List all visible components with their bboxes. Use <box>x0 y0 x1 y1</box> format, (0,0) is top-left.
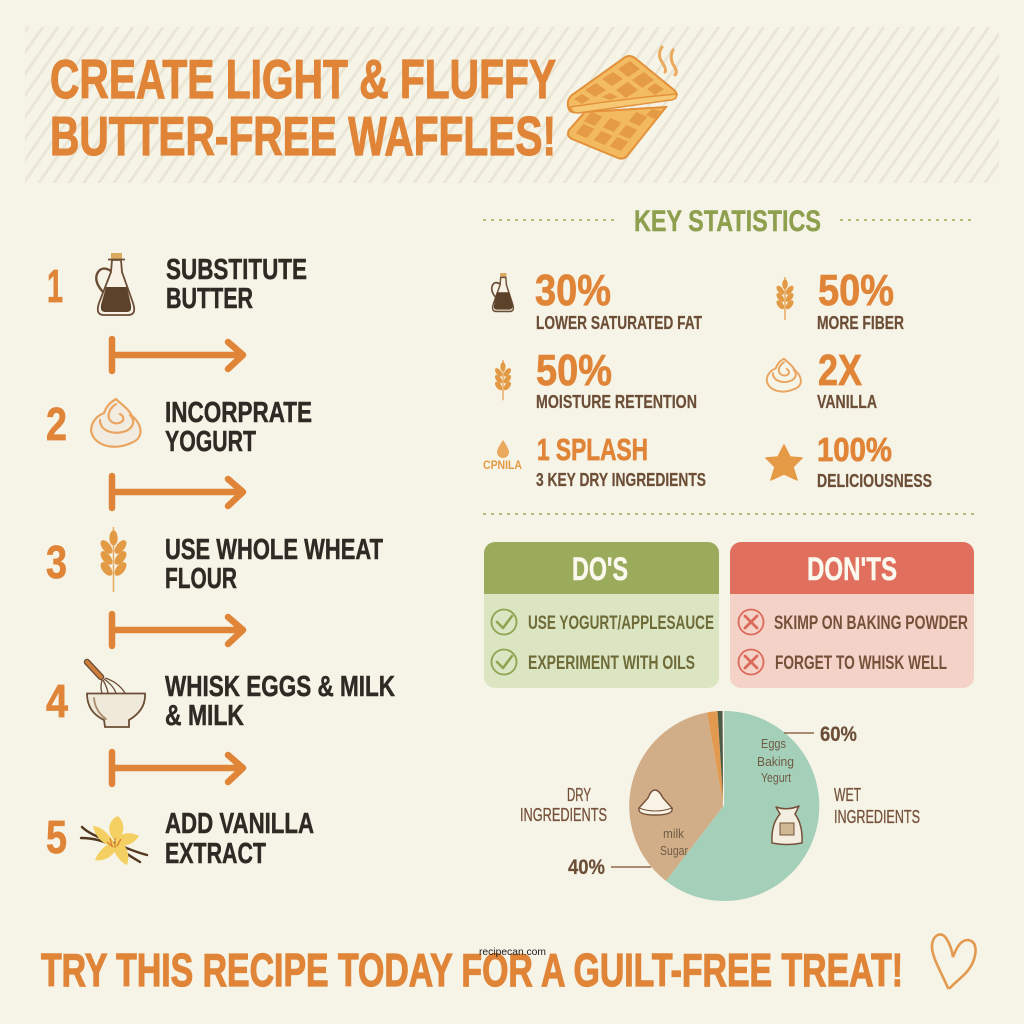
stat: 1 splash: 3 KEY DRY INGREDIENTS <box>536 470 706 490</box>
icon: check 1 <box>492 610 516 634</box>
icon: heart <box>932 934 976 988</box>
step 3: whole wheat flour: FLOUR <box>165 563 237 595</box>
icon: vanilla drop <box>483 440 522 472</box>
icon: yogurt swirl <box>91 399 141 447</box>
icon: flour mound <box>639 790 672 815</box>
step 2: incorporate yogurt: YOGURT <box>165 426 256 458</box>
panel: do's: DO'S <box>572 551 628 587</box>
step 2: incorporate yogurt: INCORPRATE <box>165 397 312 429</box>
icon: vanilla flower and pods <box>81 816 147 865</box>
step 5: add vanilla extract: 5 <box>46 811 67 863</box>
icon: cross 2 <box>738 650 764 674</box>
callout: 40% dry ingredients: DRY <box>567 785 591 805</box>
arrow 1 <box>112 339 243 371</box>
stat: 1 splash <box>483 432 706 490</box>
step 1: substitute butter <box>47 253 307 315</box>
stat: 2x vanilla <box>767 346 877 412</box>
stat: 2x vanilla: 2X <box>818 346 862 395</box>
stat: 50% moisture retention: 50% <box>536 346 612 395</box>
stat: 50% more fiber: 50% <box>818 266 894 315</box>
icon: star <box>766 445 802 480</box>
step 2: incorporate yogurt: 2 <box>46 398 67 450</box>
stat: 30% lower saturated fat: 30% <box>535 266 611 315</box>
pie chart: wet vs dry ingredients: milk <box>663 826 684 841</box>
watermark: recipecan.com <box>479 947 546 958</box>
callout: 60% wet ingredients <box>784 723 920 827</box>
icon: swirl small <box>767 359 801 392</box>
step 1: substitute butter: SUBSTITUTE <box>166 254 307 286</box>
stat: 1 splash: 1 SPLASH <box>537 432 648 467</box>
stat: 100% deliciousness: 100% <box>817 431 892 468</box>
panel: do's <box>484 542 719 688</box>
step 1: substitute butter: 1 <box>47 260 63 312</box>
panel: do's: EXPERIMENT WITH OILS <box>528 652 695 674</box>
step 4: whisk eggs and milk: & MILK <box>165 700 244 732</box>
icon: waffles with steam <box>568 47 677 159</box>
title: CREATE LIGHT & FLUFFY <box>50 48 556 110</box>
step 3: whole wheat flour: USE WHOLE WHEAT <box>165 534 383 566</box>
title <box>50 48 556 167</box>
stat: 50% more fiber: MORE FIBER <box>817 313 904 333</box>
icon: wheat small right <box>775 277 795 320</box>
icon: vanilla drop: CPNILA <box>483 458 522 472</box>
stat: 50% moisture retention: MOISTURE RETENTION <box>536 392 697 412</box>
callout: 60% wet ingredients: WET <box>834 785 861 805</box>
arrow 4 <box>112 752 243 784</box>
pie chart: wet vs dry ingredients: Yegurt <box>761 770 791 785</box>
step 4: whisk eggs and milk: 4 <box>46 675 68 727</box>
arrow 3 <box>112 614 243 646</box>
icon: wheat small <box>494 360 512 400</box>
icon: whisk and bowl <box>87 662 145 727</box>
title: BUTTER-FREE WAFFLES! <box>50 105 556 167</box>
pie chart: wet vs dry ingredients: Sugar <box>660 843 689 858</box>
stat: 50% moisture retention <box>494 346 697 412</box>
arrow 2 <box>112 476 243 508</box>
icon: wheat <box>98 527 129 592</box>
panel: don'ts: FORGET TO WHISK WELL <box>775 652 947 674</box>
stat: 2x vanilla: VANILLA <box>817 392 877 412</box>
stat: 30% lower saturated fat: LOWER SATURATED FAT <box>536 313 702 333</box>
stat: 100% deliciousness <box>766 431 932 491</box>
pie chart: wet vs dry ingredients: Eggs <box>761 736 786 751</box>
step 5: add vanilla extract: EXTRACT <box>165 838 266 870</box>
callout: 40% dry ingredients: INGREDIENTS <box>520 805 607 825</box>
stat: 30% lower saturated fat <box>492 266 702 333</box>
step 5: add vanilla extract <box>46 808 314 870</box>
step 5: add vanilla extract: ADD VANILLA <box>165 808 314 840</box>
icon: oil bottle <box>96 253 134 315</box>
callout: 60% wet ingredients: 60% <box>820 723 857 746</box>
step 4: whisk eggs and milk <box>46 662 395 732</box>
stat: 100% deliciousness: DELICIOUSNESS <box>817 471 932 491</box>
step 3: whole wheat flour <box>46 527 383 595</box>
pie chart: wet vs dry ingredients <box>629 711 819 901</box>
callout: 40% dry ingredients <box>520 785 651 879</box>
step 4: whisk eggs and milk: WHISK EGGS & MILK <box>165 671 395 703</box>
step 2: incorporate yogurt <box>46 397 312 458</box>
callout: 60% wet ingredients: INGREDIENTS <box>834 807 920 827</box>
pie chart: wet vs dry ingredients: Baking <box>757 754 794 769</box>
icon: cross 1 <box>738 610 764 634</box>
step 1: substitute butter: BUTTER <box>166 283 253 315</box>
icon: check 2 <box>492 650 516 674</box>
panel: don'ts: DON'TS <box>807 551 897 587</box>
step 3: whole wheat flour: 3 <box>46 536 67 588</box>
icon: flour sack <box>772 806 802 844</box>
callout: 40% dry ingredients: 40% <box>568 856 605 879</box>
stat: 50% more fiber <box>775 266 904 333</box>
panel: don'ts <box>730 542 974 688</box>
panel: do's: USE YOGURT/APPLESAUCE <box>528 612 714 634</box>
icon: oil bottle small <box>492 273 513 311</box>
heading: key statistics: KEY STATISTICS <box>634 205 821 238</box>
